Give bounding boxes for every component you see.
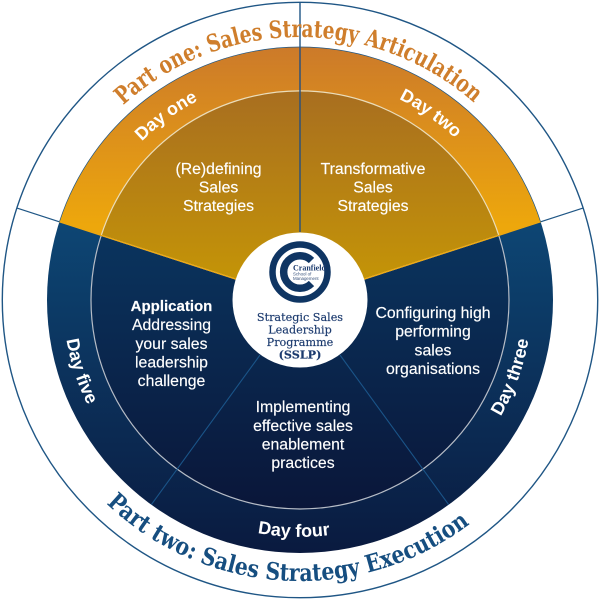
text: redefining sales strategies: Sales xyxy=(199,180,238,196)
text: configuring high performing: sales xyxy=(415,342,452,360)
icon: Cranfield logo: Cranfield xyxy=(293,264,326,272)
title: part one: Part one: Sales Strategy Articulation xyxy=(112,20,480,105)
label: day one: Day one xyxy=(134,94,196,140)
text: application: Addressing xyxy=(132,317,211,334)
text: configuring high performing: performing xyxy=(395,324,471,340)
text: implementing enablement: Implementing xyxy=(256,399,350,416)
label: day three: Day three xyxy=(490,339,528,416)
panel: part two blue disc xyxy=(47,47,553,553)
text: transformative sales strategies: Transformative xyxy=(321,161,426,178)
text: application: Application xyxy=(131,298,212,315)
text: application: challenge xyxy=(138,373,206,390)
icon: Cranfield logo: School of xyxy=(293,272,312,276)
title: part two: Part two: Sales Strategy Execution xyxy=(107,491,470,584)
text: programme name: Strategic Sales xyxy=(257,311,343,324)
label: day five: Day five xyxy=(66,338,95,404)
panel: part one gold sector xyxy=(59,47,541,300)
text: implementing enablement: effective sales xyxy=(253,418,353,435)
text: programme name: (SSLP) xyxy=(279,348,321,362)
text: configuring high performing: organisations xyxy=(386,361,480,378)
text: application: your sales xyxy=(136,336,208,353)
text: transformative sales strategies: Strategies xyxy=(337,198,409,215)
label: day four: Day four xyxy=(258,521,330,540)
icon: Cranfield logo: Management xyxy=(293,276,319,281)
text: implementing enablement: practices xyxy=(271,455,335,472)
text: redefining sales strategies: Strategies xyxy=(183,198,254,215)
text: programme name: Programme xyxy=(267,336,334,349)
text: application: leadership xyxy=(135,354,208,372)
icon: Cranfield logo xyxy=(272,244,328,300)
panel: centre hub xyxy=(232,232,368,368)
text: redefining sales strategies: (Re)defining xyxy=(175,161,262,178)
text: configuring high performing: Configuring high xyxy=(375,305,491,322)
label: day two: Day two xyxy=(400,88,460,136)
text: transformative sales strategies: Sales xyxy=(353,180,393,196)
text: programme name: Leadership xyxy=(268,324,332,336)
text: implementing enablement: enablement xyxy=(262,436,345,454)
